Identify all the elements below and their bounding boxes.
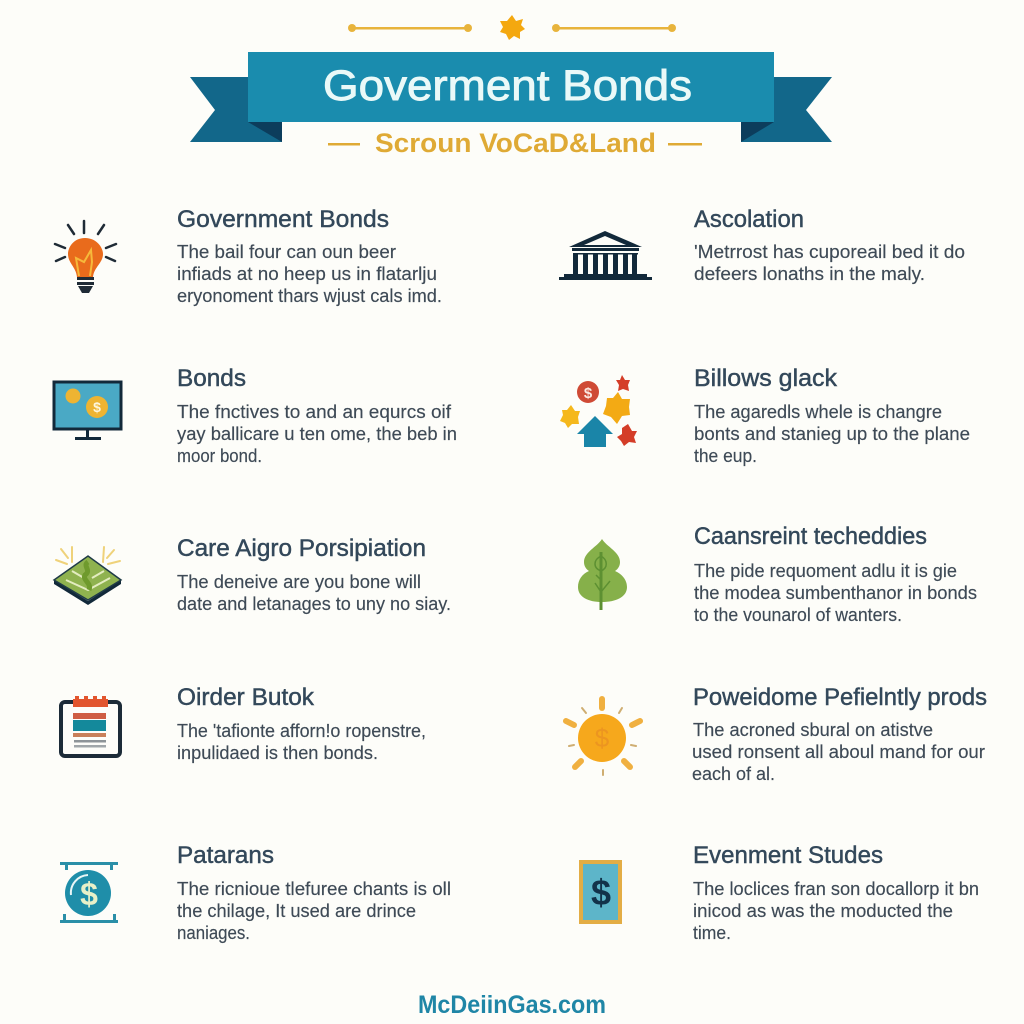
- text block: The deneive are you bone will: [177, 572, 421, 592]
- text block: The fnctives to and an equrcs oif: [177, 402, 452, 422]
- text block: eryonoment thars wjust cals imd.: [177, 286, 442, 306]
- title banner: [190, 52, 832, 142]
- heading: Billows glack: [694, 365, 838, 392]
- text block: [177, 242, 442, 306]
- text block: The ricnioue tlefuree chants is oll: [177, 879, 451, 899]
- text block: used ronsent all aboul mand for our: [692, 742, 985, 762]
- text block: [177, 721, 426, 763]
- heading: Patarans: [177, 842, 274, 869]
- text block: [177, 879, 451, 943]
- text block: [177, 572, 451, 614]
- heading: Bonds: [177, 365, 246, 392]
- text block: [692, 720, 985, 784]
- text block: 'Metrrost has cuporeail bed it do: [694, 242, 965, 262]
- heading: Ascolation: [694, 206, 804, 233]
- icon: sun coin: [566, 699, 640, 775]
- text block: [177, 402, 457, 466]
- heading: Evenment Studes: [693, 842, 883, 869]
- text block: infiads at no heep us in flatarlju: [177, 264, 437, 284]
- icon: leaf: [578, 539, 627, 610]
- text block: naniages.: [177, 923, 250, 943]
- text block: time.: [693, 923, 731, 943]
- icon: dollar note: [581, 862, 620, 922]
- text block: date and letanages to uny no siay.: [177, 594, 451, 614]
- icon: house with stars and coin: [560, 375, 637, 447]
- text block: The agaredls whele is changre: [694, 402, 942, 422]
- text block: the eup.: [694, 446, 757, 466]
- heading: Government Bonds: [177, 206, 389, 233]
- heading: Poweidome Pefielntly prods: [693, 684, 987, 711]
- text block: each of al.: [692, 764, 775, 784]
- text block: [694, 561, 977, 625]
- panel: item 5 right: [581, 842, 979, 943]
- text block: inicod as was the moducted the: [693, 901, 953, 921]
- icon: calendar list: [61, 696, 120, 756]
- text block: yay ballicare u ten ome, the beb in: [177, 424, 457, 444]
- icon: monitor with coins: $: [93, 399, 101, 415]
- text block: the modea sumbenthanor in bonds: [694, 583, 977, 603]
- icon: land map: [54, 547, 121, 605]
- panel: item 3 right: [578, 523, 977, 625]
- panel: item 3 left: [54, 535, 451, 614]
- icon: dollar note: $: [591, 872, 611, 913]
- text block: The acroned sbural on atistve: [693, 720, 933, 740]
- icon: coin scroll: [60, 862, 118, 923]
- icon: coin scroll: $: [80, 876, 98, 912]
- text block: The bail four can oun beer: [177, 242, 396, 262]
- text block: The 'tafionte afforn!o ropenstre,: [177, 721, 426, 741]
- panel: item 2 right: [560, 365, 970, 466]
- heading: Caansreint techeddies: [694, 523, 927, 550]
- heading: Oirder Butok: [177, 684, 315, 711]
- text block: The loclices fran son docallorp it bn: [693, 879, 979, 899]
- text block: [694, 242, 965, 284]
- subtitle: Scroun VoCaD&Land: [375, 128, 656, 158]
- text block: defeers lonaths in the maly.: [694, 264, 925, 284]
- icon: monitor with coins: [54, 382, 121, 440]
- top ornament: [348, 15, 676, 40]
- text block: bonts and stanieg up to the plane: [694, 424, 970, 444]
- panel: item 1 right: [559, 206, 965, 284]
- title: Goverment Bonds: [323, 62, 692, 110]
- text block: The pide requoment adlu it is gie: [694, 561, 957, 581]
- text block: [694, 402, 970, 466]
- text block: the chilage, It used are drince: [177, 901, 416, 921]
- panel: item 2 left: [54, 365, 457, 466]
- icon: light bulb: [55, 221, 116, 293]
- icon: house with stars and coin: $: [584, 385, 593, 402]
- heading: Care Aigro Porsipiation: [177, 535, 426, 562]
- icon: government building: [559, 231, 652, 280]
- footer website: McDeiinGas.com: [418, 991, 606, 1019]
- text block: inpulidaed is then bonds.: [177, 743, 378, 763]
- panel: item 1 left: [55, 206, 442, 306]
- panel: item 5 left: [60, 842, 451, 943]
- text block: moor bond.: [177, 446, 262, 466]
- text block: to the vounarol of wanters.: [694, 605, 902, 625]
- panel: item 4 left: [61, 684, 426, 763]
- icon: sun coin: $: [595, 723, 610, 753]
- text block: [693, 879, 979, 943]
- panel: item 4 right: [566, 684, 987, 784]
